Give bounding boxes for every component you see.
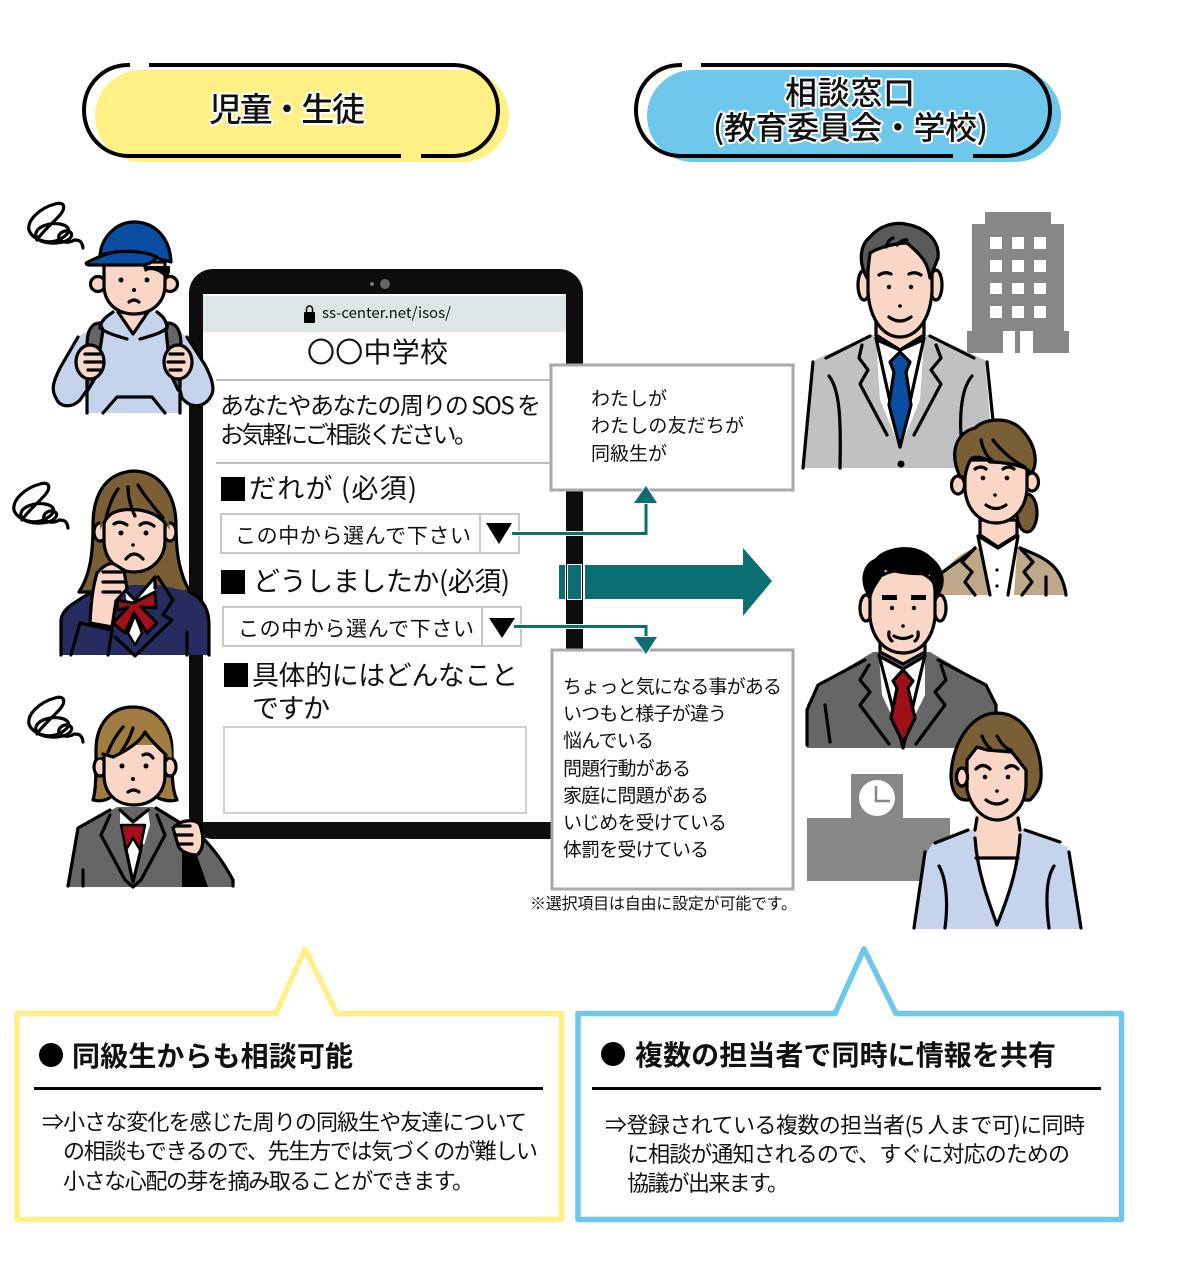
header: students: [84, 65, 509, 162]
staff: woman in light blue jacket: [913, 713, 1082, 929]
hoodie: [53, 312, 213, 413]
face: [952, 476, 964, 494]
callout: situation options: ちょっと気になる事がある: [563, 676, 782, 698]
hand and sleeve: [90, 563, 127, 627]
bob hair: [93, 707, 177, 801]
field: who: だれが (必須): [249, 467, 417, 506]
address bar: [203, 296, 566, 332]
header: consultation desk: 相談窓口: [785, 68, 915, 114]
face: [94, 523, 106, 541]
staff: man in dark gray suit: [807, 549, 997, 748]
icon: school with clock: [807, 774, 950, 881]
callout: situation options: いじめを受けている: [563, 812, 727, 834]
body text: ⇒小さな変化を感じた周りの同級生や友達について: [42, 1110, 527, 1135]
body text: の相談もできるので、先生方では気づくのが難しい: [63, 1139, 538, 1164]
hands: [76, 345, 192, 379]
face: [90, 276, 106, 292]
callout: situation options: 悩んでいる: [563, 730, 654, 752]
face: [94, 758, 106, 776]
field: who: [221, 467, 519, 553]
field: what happened: どうしましたか(必須): [253, 560, 510, 599]
field: details: [224, 661, 526, 813]
student: girl with short hair: [68, 707, 233, 887]
face: [860, 595, 872, 621]
icon: office building: [967, 212, 1069, 353]
callout: situation options: 問題行動がある: [563, 758, 691, 780]
hair and face: [951, 713, 1041, 800]
student: girl with long hair: [61, 471, 209, 656]
field: details: 具体的にはどんなこと: [252, 661, 518, 691]
cap: [100, 222, 171, 262]
thought spiral 2: [14, 483, 68, 528]
callout: situation options: 家庭に問題がある: [563, 785, 709, 807]
heading: 同級生からも相談可能: [72, 1041, 353, 1072]
body text: [605, 1108, 1085, 1196]
big arrow to consultation desk: [559, 548, 772, 616]
body text: ⇒登録されている複数の担当者(5 人まで可)に同時: [605, 1108, 1085, 1140]
blue tie: [889, 352, 911, 447]
callout: who options: 同級生が: [591, 443, 667, 465]
field: what happened: [221, 560, 521, 646]
address bar: ss-center.net/isos/: [322, 302, 451, 323]
bag strap: [182, 850, 208, 887]
header: students: 児童・生徒: [209, 83, 365, 131]
panel: classmates can also consult: [17, 949, 562, 1220]
staff: woman in beige suit: [935, 420, 1066, 595]
long hair: [79, 471, 190, 592]
intro text: あなたやあなたの周りの SOS を: [220, 386, 541, 421]
callout: who options: わたしの友だちが: [591, 415, 744, 437]
shirt and ribbon: [113, 577, 173, 656]
connector arrow to "who" options: [512, 486, 657, 535]
callout: situation options: [552, 650, 793, 889]
red tie: [891, 670, 915, 743]
heading: 複数の担当者で同時に情報を共有: [635, 1040, 1056, 1071]
field: who: この中から選んで下さい: [235, 525, 471, 548]
field: what happened: この中から選んで下さい: [238, 618, 474, 641]
callout: situation options: 体罰を受けている: [563, 839, 709, 861]
callout: who options: [551, 365, 793, 490]
callout: situation options: いつもと様子が違う: [563, 703, 727, 725]
tablet with consultation form: [189, 269, 583, 839]
body text: [42, 1110, 538, 1194]
panel: share with multiple staff: [578, 949, 1122, 1220]
note: ※選択項目は自由に設定が可能です。: [530, 895, 797, 913]
body text: 小さな心配の芽を摘み取ることができます。: [63, 1169, 474, 1194]
thought spiral 1: [29, 203, 83, 248]
header: consultation desk: (教育委員会・学校): [713, 103, 988, 149]
student: boy with cap: [53, 222, 213, 413]
camera: [370, 279, 390, 289]
field: details: ですか: [252, 694, 330, 724]
backpack straps: [87, 323, 103, 390]
staff: man in light gray suit: [803, 223, 994, 468]
hand: [173, 821, 203, 855]
header: consultation desk: [636, 65, 1061, 162]
intro text: [220, 386, 541, 450]
connector arrow to "what happened" options: [514, 625, 657, 654]
body text: に相談が通知されるので、すぐに対応のための: [627, 1142, 1070, 1167]
body text: 協議が出来ます。: [627, 1171, 789, 1196]
blazer: [61, 585, 209, 655]
face: [858, 270, 870, 300]
blazer: [68, 807, 233, 887]
callout: who options: わたしが: [591, 388, 667, 410]
school name: 〇〇中学校: [307, 337, 448, 368]
intro text: お気軽にご相談ください。: [220, 415, 478, 450]
shirt: [876, 338, 924, 448]
thought spiral 3: [29, 697, 83, 742]
